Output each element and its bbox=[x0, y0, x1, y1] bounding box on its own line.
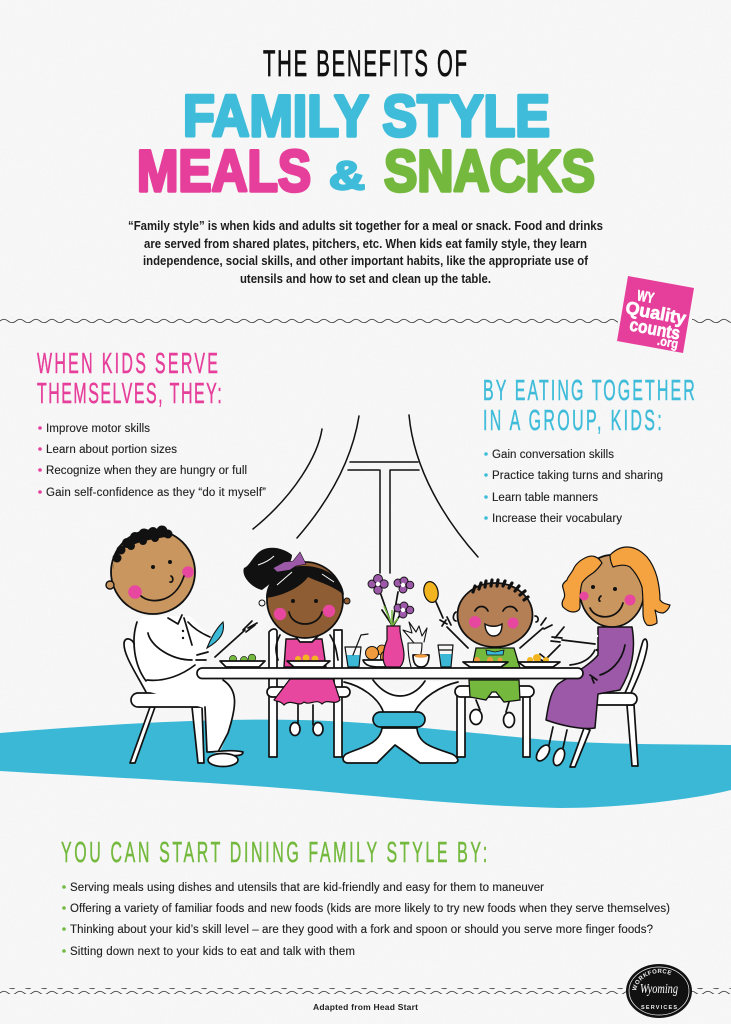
title line: family style: FAMILY STYLE bbox=[183, 84, 550, 149]
head bbox=[458, 583, 532, 647]
glass with straw bbox=[345, 634, 368, 667]
bread bowl bbox=[363, 645, 398, 667]
intro paragraph bbox=[128, 218, 603, 286]
heading: by eating together: BY EATING TOGETHER bbox=[483, 374, 695, 406]
bullet list: Learn about portion sizes bbox=[46, 444, 177, 456]
bullet list: Serving meals using dishes and utensils that are kid-friendly and easy for them to maneuver bbox=[70, 882, 544, 894]
hair bbox=[562, 547, 670, 625]
intro paragraph: utensils and how to set and clean up the table. bbox=[240, 271, 491, 286]
heading: you can start dining family style by: YOU CAN START DINING FAMILY STYLE BY: bbox=[61, 836, 487, 868]
heading: when kids serve bbox=[37, 347, 222, 409]
flowers and vase bbox=[368, 574, 414, 667]
water glass bbox=[438, 645, 453, 667]
bullet list: Gain conversation skills bbox=[492, 449, 614, 461]
logo: WY Quality Counts: .org bbox=[656, 333, 679, 351]
spoon bbox=[422, 580, 440, 604]
bullet list bbox=[62, 882, 670, 958]
girl bbox=[243, 548, 350, 736]
head bbox=[267, 562, 343, 638]
bullet list: Gain self-confidence as they “do it myself” bbox=[46, 487, 266, 499]
bullet list: Improve motor skills bbox=[46, 423, 150, 435]
bullet list bbox=[38, 423, 266, 499]
head bbox=[111, 530, 195, 614]
bullet list: Thinking about your kid’s skill level – are they good with a fork and spoon or should you serve more finger foods? bbox=[70, 924, 653, 936]
title line: the benefits of: THE BENEFITS OF bbox=[263, 44, 467, 85]
bullet list bbox=[484, 449, 663, 525]
knife and fork bbox=[207, 622, 223, 648]
man's chair bbox=[124, 639, 205, 763]
boy's plates bbox=[463, 654, 560, 667]
logo: WY Quality Counts: Quality bbox=[624, 298, 688, 328]
logo: WY Quality Counts: WY bbox=[636, 287, 655, 307]
intro paragraph: “Family style” is when kids and adults sit together for a meal or snack. Food and drinks bbox=[128, 218, 603, 233]
potted plant bbox=[403, 622, 427, 667]
bullet list: Increase their vocabulary bbox=[492, 513, 622, 525]
bullet list: Offering a variety of familiar foods and new foods (kids are more likely to try new foods when they serve themselves) bbox=[70, 903, 670, 915]
panel: when kids serve themselves bbox=[37, 347, 266, 499]
credit line: Adapted from Head Start bbox=[313, 1002, 418, 1012]
title ampersand: & bbox=[329, 154, 365, 198]
girl's plate bbox=[287, 654, 330, 667]
bullet list: Learn table manners bbox=[492, 492, 598, 504]
logo: Workforce Services Wyoming: Wyoming bbox=[640, 982, 678, 997]
plate of greens bbox=[220, 654, 265, 667]
boy's chair bbox=[455, 686, 534, 757]
mother's chair bbox=[570, 639, 647, 767]
bullet list: Sitting down next to your kids to eat and talk with them bbox=[70, 946, 355, 958]
logo: Workforce Services Wyoming: SERVICES bbox=[641, 1005, 677, 1011]
logo: Workforce Services Wyoming bbox=[626, 964, 692, 1018]
panel: by eating together bbox=[483, 374, 695, 525]
head bbox=[580, 555, 644, 627]
table items: plates, vase and glasses bbox=[220, 574, 560, 667]
window and curtain lines bbox=[253, 415, 478, 573]
girl's chair bbox=[267, 629, 350, 757]
heading: by eating together bbox=[483, 374, 695, 436]
heading: when kids serve: WHEN KIDS SERVE bbox=[37, 347, 218, 379]
illustration: family at table bbox=[106, 415, 670, 767]
heading: by eating together: IN A GROUP, KIDS: bbox=[483, 404, 662, 436]
logo: WY Quality Counts bbox=[617, 276, 694, 353]
bullet list: Practice taking turns and sharing bbox=[492, 470, 663, 482]
blue floor wave bbox=[0, 720, 731, 808]
boy bbox=[422, 580, 552, 728]
title bbox=[137, 44, 595, 204]
bullet list: Recognize when they are hungry or full bbox=[46, 465, 247, 477]
heading: when kids serve: THEMSELVES, THEY: bbox=[37, 377, 222, 409]
title word: snacks: SNACKS bbox=[384, 139, 595, 204]
table top bbox=[197, 668, 583, 678]
title word: meals: MEALS bbox=[137, 139, 311, 204]
logo: Workforce Services Wyoming: WORKFORCE bbox=[632, 968, 672, 990]
intro paragraph: independence, social skills, and other important habits, like the appropriate use of bbox=[143, 253, 589, 268]
mother bbox=[534, 547, 670, 767]
father bbox=[106, 526, 257, 766]
table pedestal bbox=[343, 680, 458, 763]
logo: WY Quality Counts: counts bbox=[628, 315, 682, 344]
divider lines bbox=[0, 317, 731, 994]
small cup bbox=[413, 654, 429, 667]
panel: start dining family style bbox=[61, 836, 670, 958]
intro paragraph: are served from shared plates, pitchers, etc. When kids eat family style, they learn bbox=[144, 236, 587, 251]
